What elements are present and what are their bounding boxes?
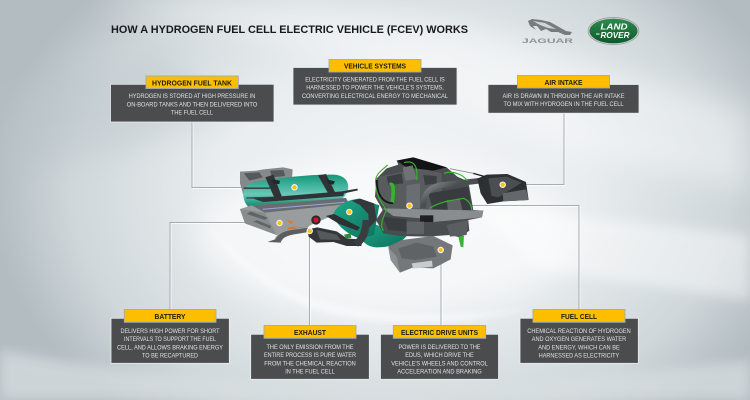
panel: vehicle systems: HARNESSED TO POWER THE VEHICLE'S SYSTEMS, xyxy=(306,85,444,92)
panel: air intake xyxy=(488,76,639,113)
panel: vehicle systems: CONVERTING ELECTRICAL ENERGY TO MECHANICAL xyxy=(302,93,448,100)
panel: battery: TO BE RECAPTURED xyxy=(142,353,198,360)
panel: exhaust xyxy=(251,326,369,379)
upper teal vessel xyxy=(333,199,379,239)
logo: Land Rover: ROVER xyxy=(600,31,630,40)
panel: electric drive units: EDUS, WHICH DRIVE THE xyxy=(405,352,474,359)
panel: battery: DELIVERS HIGH POWER FOR SHORT xyxy=(120,328,220,335)
panel: battery: BATTERY xyxy=(154,312,186,321)
hotspot markers xyxy=(277,182,505,253)
panel: exhaust: FROM THE CHEMICAL REACTION xyxy=(264,360,356,367)
panel: hydrogen fuel tank xyxy=(110,76,274,122)
panel: vehicle systems: ELECTRICITY GENERATED FROM THE FUEL CELL IS xyxy=(305,76,445,84)
panel: exhaust: ENTIRE PROCESS IS PURE WATER xyxy=(264,352,356,359)
rear unit xyxy=(240,167,293,195)
panel: air intake: TO MIX WITH HYDROGEN IN THE FUEL CELL xyxy=(504,101,624,108)
logo: Land Rover: LAND xyxy=(600,22,628,32)
hydrogen tank xyxy=(243,175,348,211)
coolant pipe xyxy=(423,181,480,208)
panel: battery xyxy=(111,310,229,363)
logo: Jaguar xyxy=(522,19,574,45)
panel: electric drive units: ELECTRIC DRIVE UNITS xyxy=(401,328,478,337)
panel: fuel cell: HARNESSED AS ELECTRICITY xyxy=(539,353,619,360)
panel: vehicle systems xyxy=(293,60,457,105)
panel: electric drive units: ACCELERATION AND BRAKING xyxy=(397,369,482,376)
panel: vehicle systems: VEHICLE SYSTEMS xyxy=(344,62,406,70)
red valve xyxy=(311,215,321,225)
panel: exhaust: THE ONLY EMISSION FROM THE xyxy=(266,344,354,351)
panel: exhaust: IN THE FUEL CELL xyxy=(285,369,335,376)
lower tank xyxy=(360,220,407,247)
panel: hydrogen fuel tank: ON-BOARD TANKS AND THEN DELIVERED INTO xyxy=(127,102,257,108)
panel: fuel cell: AND ENERGY, WHICH CAN BE xyxy=(538,344,620,351)
panel: battery: INTERVALS TO SUPPORT THE FUEL xyxy=(124,336,216,343)
powertrain illustration xyxy=(240,157,529,273)
panel: fuel cell: AND OXYGEN GENERATES WATER xyxy=(532,336,627,343)
exhaust silencer xyxy=(307,227,363,246)
panel: hydrogen fuel tank: HYDROGEN FUEL TANK xyxy=(152,78,233,88)
exhaust pipe xyxy=(267,227,309,243)
panel: air intake: AIR INTAKE xyxy=(544,78,583,87)
panel: battery: CELL, AND ALLOWS BRAKING ENERGY xyxy=(117,344,223,351)
logo: Land Rover xyxy=(588,17,639,45)
panel: fuel cell xyxy=(520,310,638,363)
panel: electric drive units: POWER IS DELIVERED TO THE xyxy=(398,344,480,351)
drive unit xyxy=(388,236,453,273)
fuel cell stack xyxy=(375,157,483,237)
connector lines xyxy=(170,113,580,325)
panel: fuel cell: FUEL CELL xyxy=(561,312,598,321)
battery tray xyxy=(240,198,351,235)
panel: electric drive units xyxy=(380,326,498,379)
panel: hydrogen fuel tank: HYDROGEN IS STORED AT HIGH PRESSURE IN xyxy=(129,93,255,100)
title: HOW A HYDROGEN FUEL CELL ELECTRIC VEHICLE (FCEV) WORKS xyxy=(111,24,468,36)
panel: fuel cell: CHEMICAL REACTION OF HYDROGEN xyxy=(527,328,631,335)
panel: air intake: AIR IS DRAWN IN THROUGH THE AIR INTAKE xyxy=(502,93,624,100)
air intake xyxy=(477,174,529,204)
logo: Jaguar: JAGUAR xyxy=(522,39,574,45)
panel: exhaust: EXHAUST xyxy=(294,328,327,337)
panel: hydrogen fuel tank: THE FUEL CELL xyxy=(171,110,213,117)
green hoses xyxy=(376,162,472,231)
panel: electric drive units: VEHICLE'S WHEELS AND CONTROL xyxy=(391,360,488,367)
